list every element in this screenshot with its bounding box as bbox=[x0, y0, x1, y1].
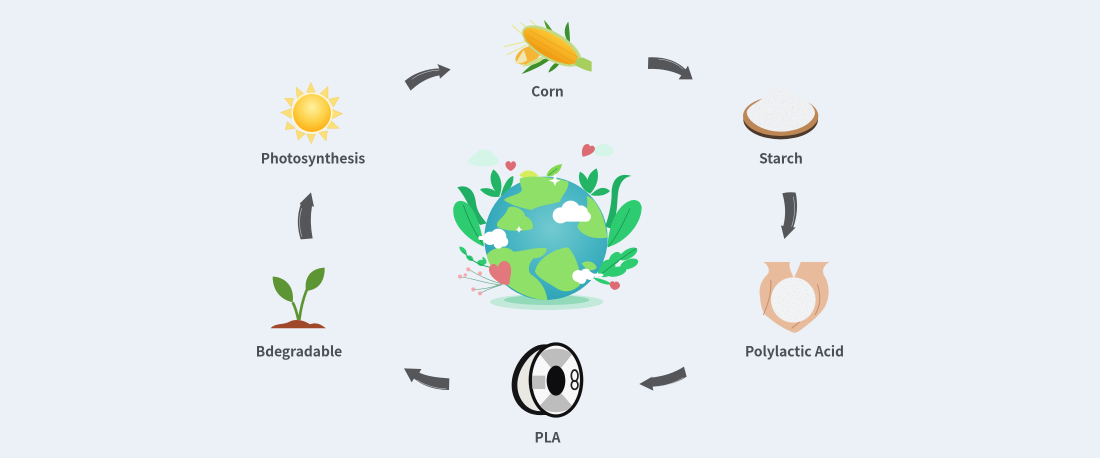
icon: corn bbox=[504, 17, 592, 75]
ground shadow bbox=[490, 294, 603, 310]
label: Starch: Starch bbox=[759, 148, 803, 168]
icon: starch bowl bbox=[743, 87, 818, 139]
arrow: starch to polylactic acid bbox=[781, 192, 797, 239]
label: Corn: Corn bbox=[531, 80, 564, 100]
continents bbox=[487, 177, 607, 300]
arrow: polylactic acid to PLA bbox=[639, 367, 687, 391]
white clouds bbox=[478, 173, 603, 284]
arrow: biodegradable to photosynthesis bbox=[298, 192, 314, 239]
small hearts bbox=[505, 144, 620, 290]
label: Photosynthesis: Photosynthesis bbox=[261, 148, 365, 168]
globe bbox=[484, 177, 608, 300]
icon: hands holding pellets bbox=[760, 262, 829, 333]
clouds pale bbox=[467, 144, 614, 166]
icon: earth with plants and hearts bbox=[453, 144, 642, 310]
icon: PLA filament spool bbox=[512, 342, 583, 418]
corn group bbox=[504, 17, 592, 75]
icon: sun bbox=[281, 82, 343, 144]
label: PLA: PLA bbox=[535, 426, 561, 446]
label: Bdegradable: Bdegradable bbox=[256, 340, 342, 360]
arrow: photosynthesis to corn bbox=[405, 64, 451, 91]
left plants bbox=[453, 169, 513, 295]
arrow: PLA to biodegradable bbox=[404, 368, 449, 390]
label: Polylactic Acid: Polylactic Acid bbox=[745, 340, 844, 360]
top leaf and bush bbox=[519, 164, 562, 178]
icon: seedling bbox=[271, 268, 326, 328]
large heart bbox=[489, 261, 511, 285]
right plants bbox=[579, 168, 642, 285]
arrow: corn to starch bbox=[648, 57, 693, 79]
